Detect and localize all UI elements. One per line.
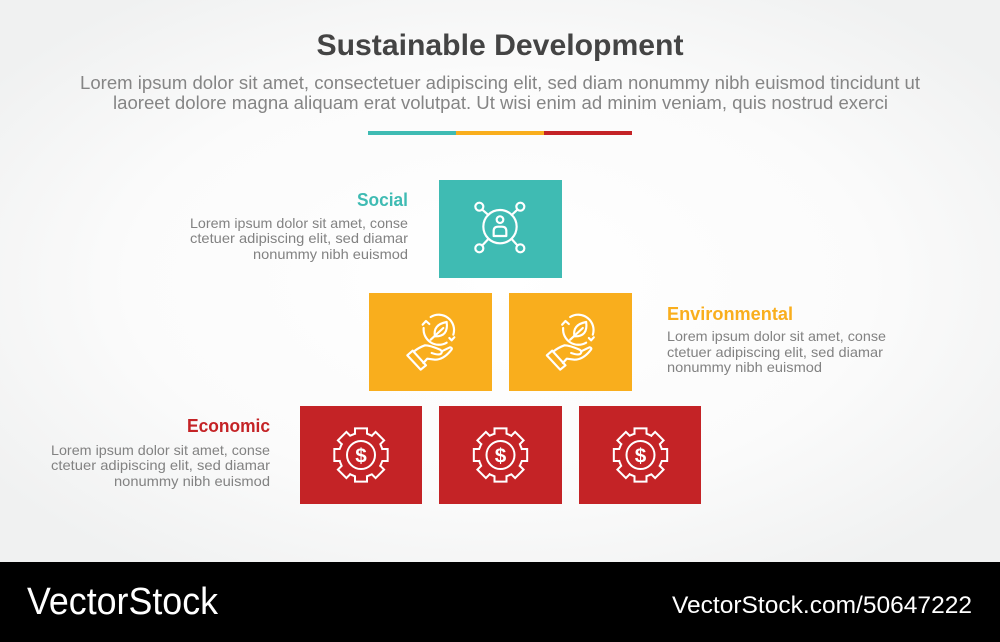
social description: ctetuer adipiscing elit, sed diamar (190, 230, 408, 246)
icon: hand with leaf left (407, 315, 454, 370)
icon: dollar gear right: $ (635, 444, 647, 467)
environmental description: ctetuer adipiscing elit, sed diamar (667, 344, 883, 360)
icon: dollar gear middle (474, 428, 527, 482)
economic label (51, 416, 270, 489)
social label (190, 190, 408, 262)
environmental description: nonummy nibh euismod (667, 359, 822, 375)
pyramid bottom tier: economic (300, 406, 701, 504)
footer url: VectorStock.com/50647222 (672, 592, 972, 619)
pyramid top tier: social (439, 180, 562, 278)
economic description: nonummy nibh euismod (114, 473, 270, 489)
social description: Lorem ipsum dolor sit amet, conse (190, 215, 408, 231)
orange block right (509, 293, 632, 391)
environmental description (667, 328, 886, 375)
subtitle (80, 73, 920, 113)
social heading: Social (357, 190, 408, 210)
economic description: Lorem ipsum dolor sit amet, conse (51, 442, 270, 458)
icon: person network (475, 203, 524, 252)
icon: dollar gear middle: $ (495, 444, 507, 467)
orange block left (369, 293, 492, 391)
red block left (300, 406, 422, 504)
social description: nonummy nibh euismod (253, 246, 408, 262)
environmental description: Lorem ipsum dolor sit amet, conse (667, 328, 886, 344)
economic heading: Economic (187, 416, 270, 436)
icon: dollar gear right (614, 428, 667, 482)
icon: hand with leaf right (547, 315, 594, 370)
icon: dollar gear left: $ (355, 444, 367, 467)
subtitle: Lorem ipsum dolor sit amet, consectetuer adipiscing elit, sed diam nonummy nibh euismod tincidunt ut (80, 73, 920, 93)
footer bar (0, 562, 1000, 642)
subtitle: laoreet dolore magna aliquam erat volutpat. Ut wisi enim ad minim veniam, quis nostrud exerci (113, 93, 888, 113)
economic description (51, 442, 270, 489)
title: Sustainable Development (316, 29, 684, 62)
tricolor divider (368, 131, 632, 135)
red block middle (439, 406, 562, 504)
teal block (439, 180, 562, 278)
economic description: ctetuer adipiscing elit, sed diamar (51, 457, 270, 473)
pyramid middle tier: environmental (369, 293, 632, 391)
footer logo: VectorStock (27, 581, 219, 623)
icon: dollar gear left (334, 428, 388, 482)
red block right (579, 406, 701, 504)
environmental heading: Environmental (667, 304, 793, 324)
environmental label (667, 304, 886, 375)
social description (190, 215, 408, 262)
